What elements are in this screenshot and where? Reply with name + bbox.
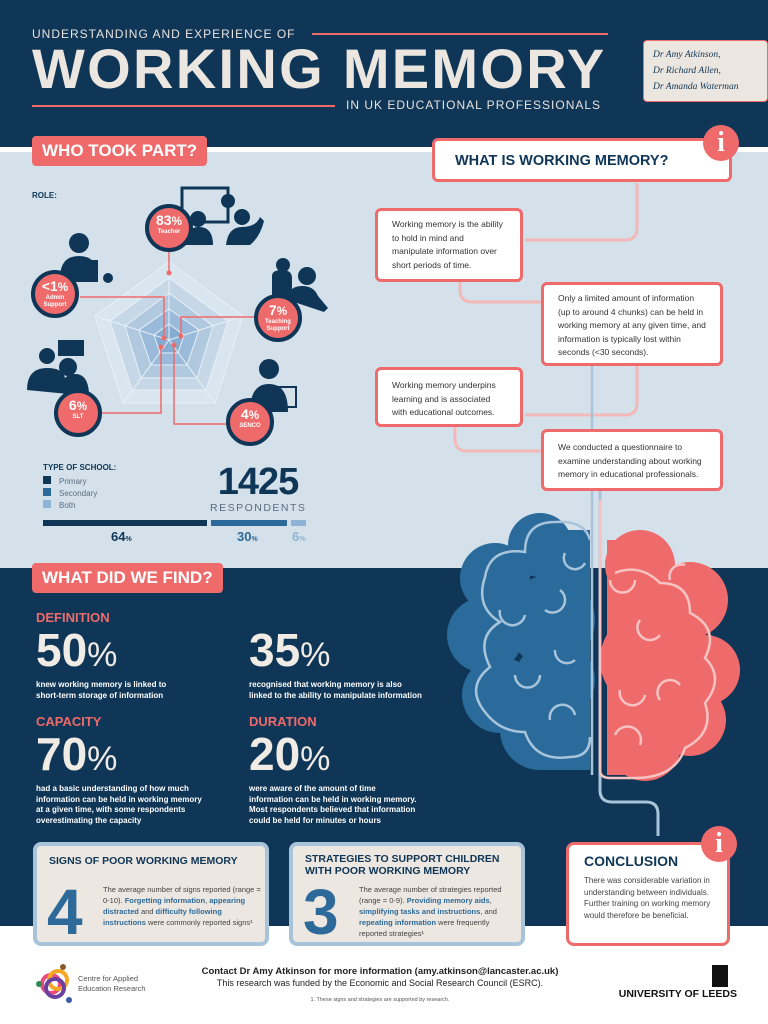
- type of school legend: Primary: [59, 477, 87, 486]
- finding: 35%: linked to the ability to manipulate information: [249, 690, 422, 700]
- logo: centre for applied education research: Centre for Applied: [78, 974, 138, 983]
- finding: capacity 70%: information can be held in working memory: [36, 794, 202, 804]
- role: teaching support: [254, 294, 302, 342]
- role: admin support: <1%: [42, 278, 68, 294]
- finding: capacity 70%: 70%: [36, 728, 117, 780]
- panel: strategies: 3: [303, 876, 339, 948]
- role label: ROLE:: [32, 191, 57, 200]
- finding: 35%: recognised that working memory is also: [249, 680, 402, 689]
- role: teacher: Teacher: [158, 229, 180, 235]
- role: teacher: [145, 204, 193, 252]
- panel: conclusion: CONCLUSION: [584, 853, 678, 869]
- school type bar: [43, 520, 306, 544]
- definition box 1: [375, 208, 523, 282]
- school type bar: 64%: [111, 529, 132, 544]
- role: SLT: [54, 389, 102, 437]
- icon: info conclusion: [701, 826, 737, 862]
- panel: strategies: [289, 842, 525, 946]
- contact text: This research was funded by the Economic and Social Research Council (ESRC).: [217, 978, 543, 988]
- title block: IN UK EDUCATIONAL PROFESSIONALS: [346, 98, 601, 112]
- heading: what is working memory: [432, 138, 732, 182]
- definition box 1: Working memory is the ability to hold in mind and manipulate information over short periods of time.: [392, 219, 503, 270]
- logo: centre for applied education research: Education Research: [78, 984, 146, 992]
- authors box: Dr Richard Allen,: [653, 66, 721, 76]
- contact text: Contact Dr Amy Atkinson for more information (amy.atkinson@lancaster.ac.uk): [202, 966, 558, 977]
- finding: 35%: [249, 624, 422, 700]
- authors box: Dr Amanda Waterman: [653, 82, 739, 92]
- finding: duration 20%: 20%: [249, 728, 330, 780]
- role: teaching support: 7%: [269, 302, 287, 318]
- panel: signs of poor working memory: SIGNS OF POOR WORKING MEMORY: [49, 855, 238, 867]
- finding: capacity 70%: [36, 714, 202, 824]
- role: SENCO: 4%: [241, 406, 259, 422]
- respondents count: [210, 461, 306, 514]
- title block: UNDERSTANDING AND EXPERIENCE OF: [32, 27, 295, 41]
- heading: who took part: WHO TOOK PART?: [42, 141, 197, 160]
- school type bar: 30%: [237, 529, 258, 544]
- finding: capacity 70%: CAPACITY: [36, 714, 101, 729]
- finding: definition 50%: short-term storage of information: [36, 690, 163, 700]
- finding: capacity 70%: had a basic understanding of how much: [36, 784, 189, 793]
- finding: duration 20%: were aware of the amount of time: [249, 784, 376, 793]
- icons: [27, 188, 328, 412]
- light blue section background: [0, 152, 768, 568]
- radar chart with role icons: [27, 186, 328, 425]
- finding: duration 20%: could be held for minutes or hours: [249, 816, 381, 824]
- authors box: Dr Amy Atkinson,: [653, 50, 720, 60]
- school type bar: 6%: [292, 529, 305, 544]
- finding: definition 50%: [36, 610, 166, 700]
- finding: duration 20%: information can be held in working memory.: [249, 794, 416, 804]
- role: teacher: 83%: [156, 212, 182, 228]
- title block: WORKING MEMORY: [32, 37, 607, 100]
- finding: definition 50%: knew working memory is linked to: [36, 680, 166, 689]
- definition box 2: Only a limited amount of information (up to around 4 chunks) can be held in working memory at any given time, and information is typically lost within seconds (<30 seconds).: [558, 293, 706, 357]
- header background: [0, 0, 768, 147]
- finding: capacity 70%: at a given time, with some respondents: [36, 805, 185, 814]
- contact text: 1. These signs and strategies are supported by research.: [310, 997, 450, 1003]
- role: teaching support: Support: [266, 326, 290, 332]
- finding: 35%: 35%: [249, 624, 330, 676]
- finding: duration 20%: Most respondents believed that information: [249, 805, 415, 814]
- authors box: [643, 40, 768, 102]
- definition box 3: Working memory underpins learning and is associated with educational outcomes.: [392, 380, 496, 417]
- logo: centre for applied education research: [36, 964, 146, 1003]
- panel: conclusion: There was considerable variation in understanding between individuals. Further training on working memory would therefore be beneficial.: [584, 876, 710, 920]
- heading: who took part: [32, 136, 207, 166]
- panel: strategies: The average number of strategies reported (range = 0-9). Providing memory aids, simplifying tasks and instructions, and repeating information were frequently reported strategies¹: [359, 885, 502, 938]
- role: SLT: SLT: [73, 414, 83, 420]
- definition box 2: [541, 282, 723, 366]
- role: admin support: Support: [44, 302, 66, 308]
- role: admin support: Admin: [46, 295, 64, 301]
- type of school legend: Both: [59, 501, 75, 510]
- logo: university of leeds: [619, 965, 737, 1000]
- dark findings section background: [0, 568, 768, 926]
- finding: definition 50%: DEFINITION: [36, 610, 110, 625]
- definition box 3: [375, 367, 523, 427]
- panel: signs of poor working memory: [33, 842, 269, 946]
- role: SLT: 6%: [69, 397, 87, 413]
- respondents count: RESPONDENTS: [210, 502, 306, 514]
- definition box 4: [541, 429, 723, 491]
- icon: info conclusion: i: [715, 828, 723, 859]
- panel: signs of poor working memory: 4: [47, 876, 83, 948]
- panel: signs of poor working memory: The average number of signs reported (range = 0-10). Forgetting information, appearing distracted and difficulty following instructions were commonly reported signs¹: [103, 885, 261, 927]
- panel: conclusion: [566, 842, 730, 946]
- type of school legend: TYPE OF SCHOOL:: [43, 463, 116, 472]
- icon: info: [703, 125, 739, 161]
- finding: duration 20%: [249, 714, 416, 824]
- finding: capacity 70%: overestimating the capacity: [36, 816, 141, 824]
- role: SENCO: [226, 398, 274, 446]
- logo: university of leeds: UNIVERSITY OF LEEDS: [619, 988, 737, 1000]
- type of school legend: [43, 463, 116, 510]
- panel: strategies: STRATEGIES TO SUPPORT CHILDREN: [305, 853, 499, 865]
- role: teaching support: Teaching: [265, 319, 291, 325]
- icon: info: i: [717, 127, 725, 158]
- type of school legend: Secondary: [59, 489, 97, 498]
- respondents count: 1425: [218, 461, 298, 503]
- finding: definition 50%: 50%: [36, 624, 117, 676]
- contact text: [202, 966, 558, 1003]
- panel: strategies: WITH POOR WORKING MEMORY: [305, 865, 470, 877]
- heading: what did we find: WHAT DID WE FIND?: [42, 568, 213, 587]
- heading: what is working memory: WHAT IS WORKING MEMORY?: [455, 153, 668, 169]
- definition box 4: We conducted a questionnaire to examine understanding about working memory in educational professionals.: [558, 442, 702, 479]
- role: admin support: [31, 270, 79, 318]
- finding: duration 20%: DURATION: [249, 714, 317, 729]
- brain: [447, 335, 740, 781]
- role: SENCO: SENCO: [239, 423, 261, 429]
- heading: what did we find: [32, 563, 223, 593]
